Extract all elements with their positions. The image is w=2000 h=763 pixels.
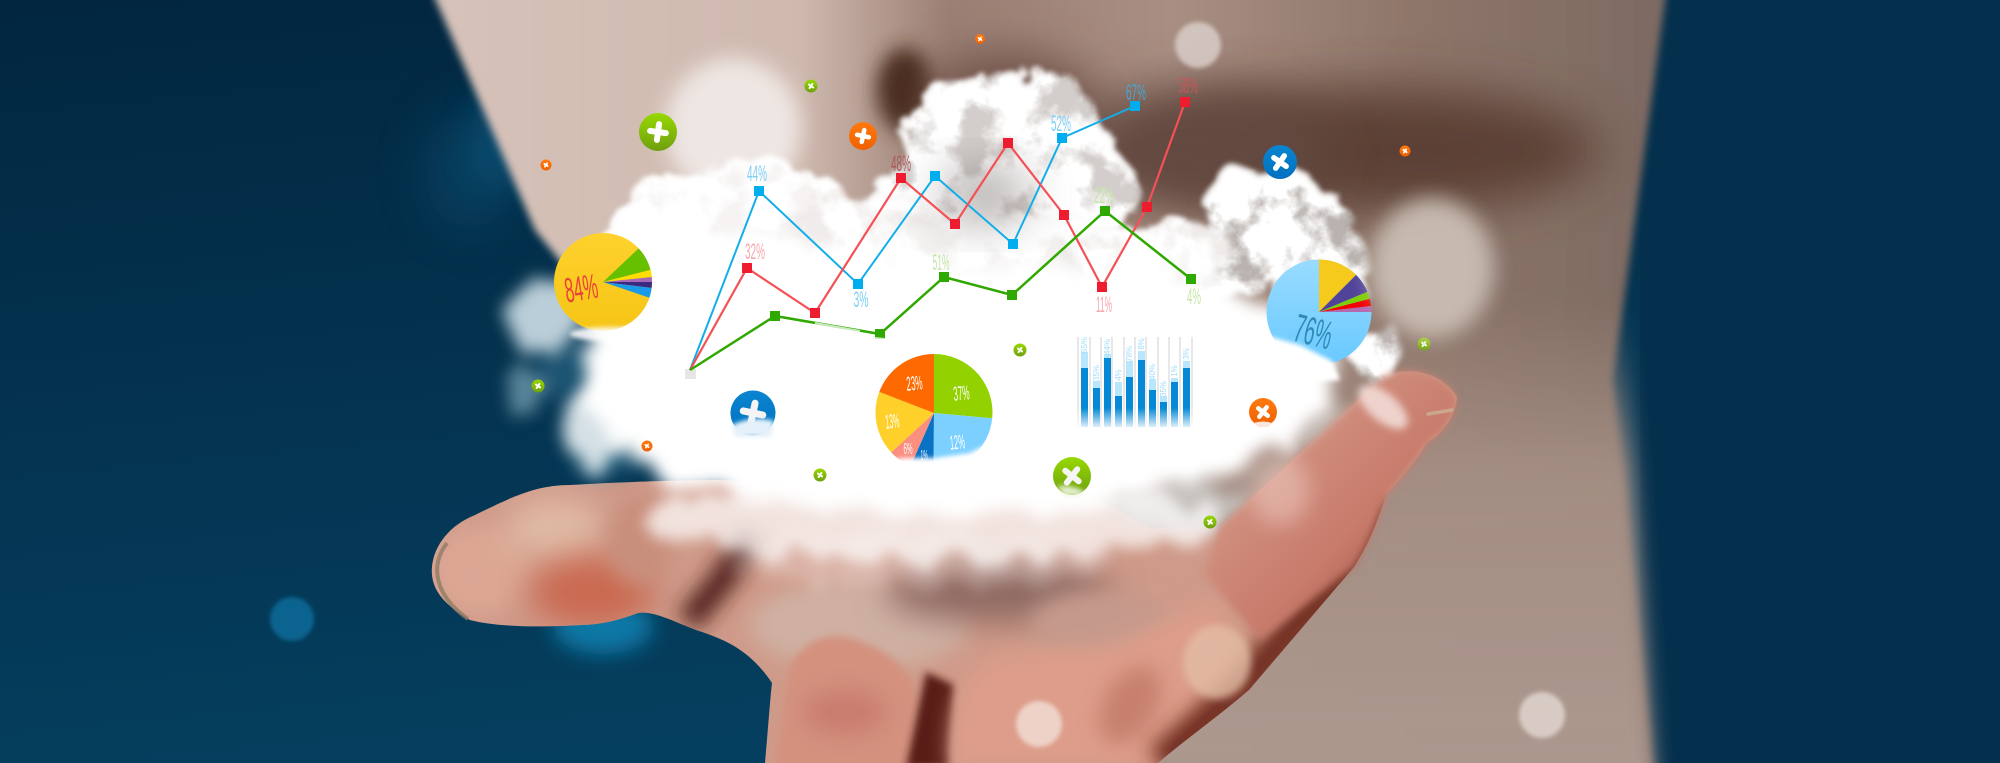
bar chart value labels: 44% [1103,339,1112,355]
bar chart gridlines [1078,337,1192,428]
cloud: interior shade [943,169,1027,221]
thumb shading [430,495,752,628]
icon: blue plus right [1263,145,1297,179]
cloud: white main mass [585,235,1340,512]
bar chart value labels: 8% [1137,338,1146,350]
line chart value labels: 32% [745,239,765,264]
icon: small orange plus cloud [642,440,652,452]
pie label: 84%: 84% [562,267,601,310]
cloud: grey upper humps [875,71,1397,385]
centre pie labels: 13% [885,410,900,434]
pie cloud overlay [570,327,654,341]
chart origin marker [685,369,696,379]
line chart value labels: 44% [747,161,767,186]
bar chart light bars [1081,351,1190,427]
bar chart value labels: 4% [1114,369,1123,381]
icon: large green plus [639,113,677,151]
blurred torso [427,0,1668,763]
pie chart: 76% [1266,260,1372,383]
pie chart: centre shares: 37% [953,382,970,406]
blue series [690,101,1140,370]
centre pie labels: 12% [949,431,966,455]
centre pie cloud overlay [870,440,1000,480]
right background panel [1640,0,2000,763]
icon: small orange plus top [975,34,985,44]
bar chart value labels: 3% [1182,348,1191,360]
icon: large green plus lower [1053,457,1091,496]
cloud: pale left hump [605,165,1225,315]
line chart value labels: 67% [1126,80,1146,105]
finger shading [775,636,916,763]
icon: small green plus top [804,80,818,92]
palm shading [750,562,1170,670]
line chart value labels: 22% [1094,183,1114,208]
bar chart base fade [1072,408,1196,430]
centre pie labels [885,372,970,464]
centre pie labels: 6% [904,441,912,458]
line chart value labels: 52% [1051,111,1071,136]
bar chart value labels: 35% [1092,365,1101,381]
line chart value labels: 48% [891,151,911,176]
pie cloud overlay [1258,336,1340,385]
line chart [685,73,1201,379]
index finger over cloud [1205,371,1457,640]
thumb nail edge [437,543,468,619]
line chart value labels [745,73,1201,317]
icon: small green plus centre [1014,344,1026,356]
icon: small green plus right [1418,338,1430,350]
fingernail [1428,410,1452,414]
line chart value labels: 58% [1178,73,1198,98]
cloud: underside streaks over palm [640,480,1220,586]
bar chart value labels: 1% [1170,365,1179,377]
translucent cloud on finger base [1250,455,1310,525]
green series [690,206,1196,370]
icon: small green plus far left [532,380,544,392]
centre pie labels: 1% [920,447,928,464]
centre pie labels: 23% [906,372,923,396]
icon: small orange plus left [540,160,552,170]
background blue glows [425,90,653,654]
infographic canvas: 4% [1187,284,1201,309]
line chart value labels: 3% [854,287,868,312]
icon: small orange plus right [1400,146,1410,156]
bar chart dark bars [1081,358,1190,427]
bokeh light spots [270,22,1565,747]
cloud: translucent wisps [504,273,1380,529]
icon: orange plus right lower [1249,398,1277,427]
cloud patch on finger [1351,377,1415,437]
icon: small green plus lower left [814,468,826,482]
cloud [504,71,1397,586]
cloud: white core [640,285,1310,492]
pie chart: 84% [554,233,652,343]
bar chart value labels: 65% [1080,337,1089,353]
icon: small green plus lower right [1204,516,1216,528]
pie label: 76%: 76% [1289,306,1337,358]
bar chart value labels: 78% [1125,346,1134,362]
red series [690,97,1190,370]
icon: orange plus [849,122,877,150]
open hand [420,360,1470,763]
bar chart [1072,337,1196,430]
icon: blue plus in cloud [730,390,776,437]
bar chart value labels: 35% [1159,381,1168,397]
line chart value labels: 51% [932,250,950,275]
pie chart: centre shares [876,354,992,462]
bar chart value labels: 40% [1148,364,1157,380]
white wisp across green line [815,323,885,339]
cloud: dark teal haze behind wisps [535,340,637,473]
line chart value labels: 11% [1096,292,1112,317]
bar chart value labels [1080,337,1191,397]
